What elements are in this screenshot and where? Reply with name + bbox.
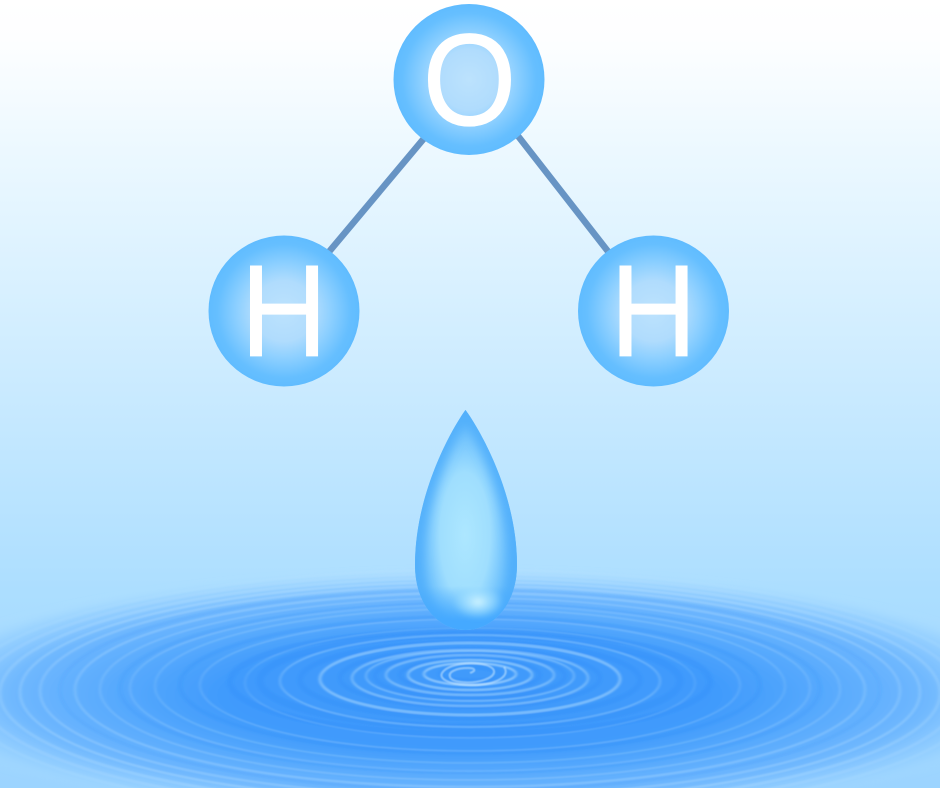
central swirl: [441, 663, 506, 685]
ripple rings: [0, 570, 940, 788]
atom: oxygen: [394, 4, 544, 155]
bond: oxygen to left hydrogen: [328, 136, 426, 253]
bond: oxygen to right hydrogen: [518, 136, 610, 254]
atom: right hydrogen: [578, 236, 729, 386]
atom: left hydrogen: [208, 236, 360, 386]
ripples: spiral water surface: [0, 569, 940, 788]
atom: oxygen: O: [423, 6, 516, 153]
drop rim shading: [415, 410, 517, 630]
drop highlight: [452, 585, 504, 619]
atom: left hydrogen: H: [240, 237, 328, 384]
atom: right hydrogen: H: [610, 237, 697, 384]
water drop: [415, 410, 517, 630]
